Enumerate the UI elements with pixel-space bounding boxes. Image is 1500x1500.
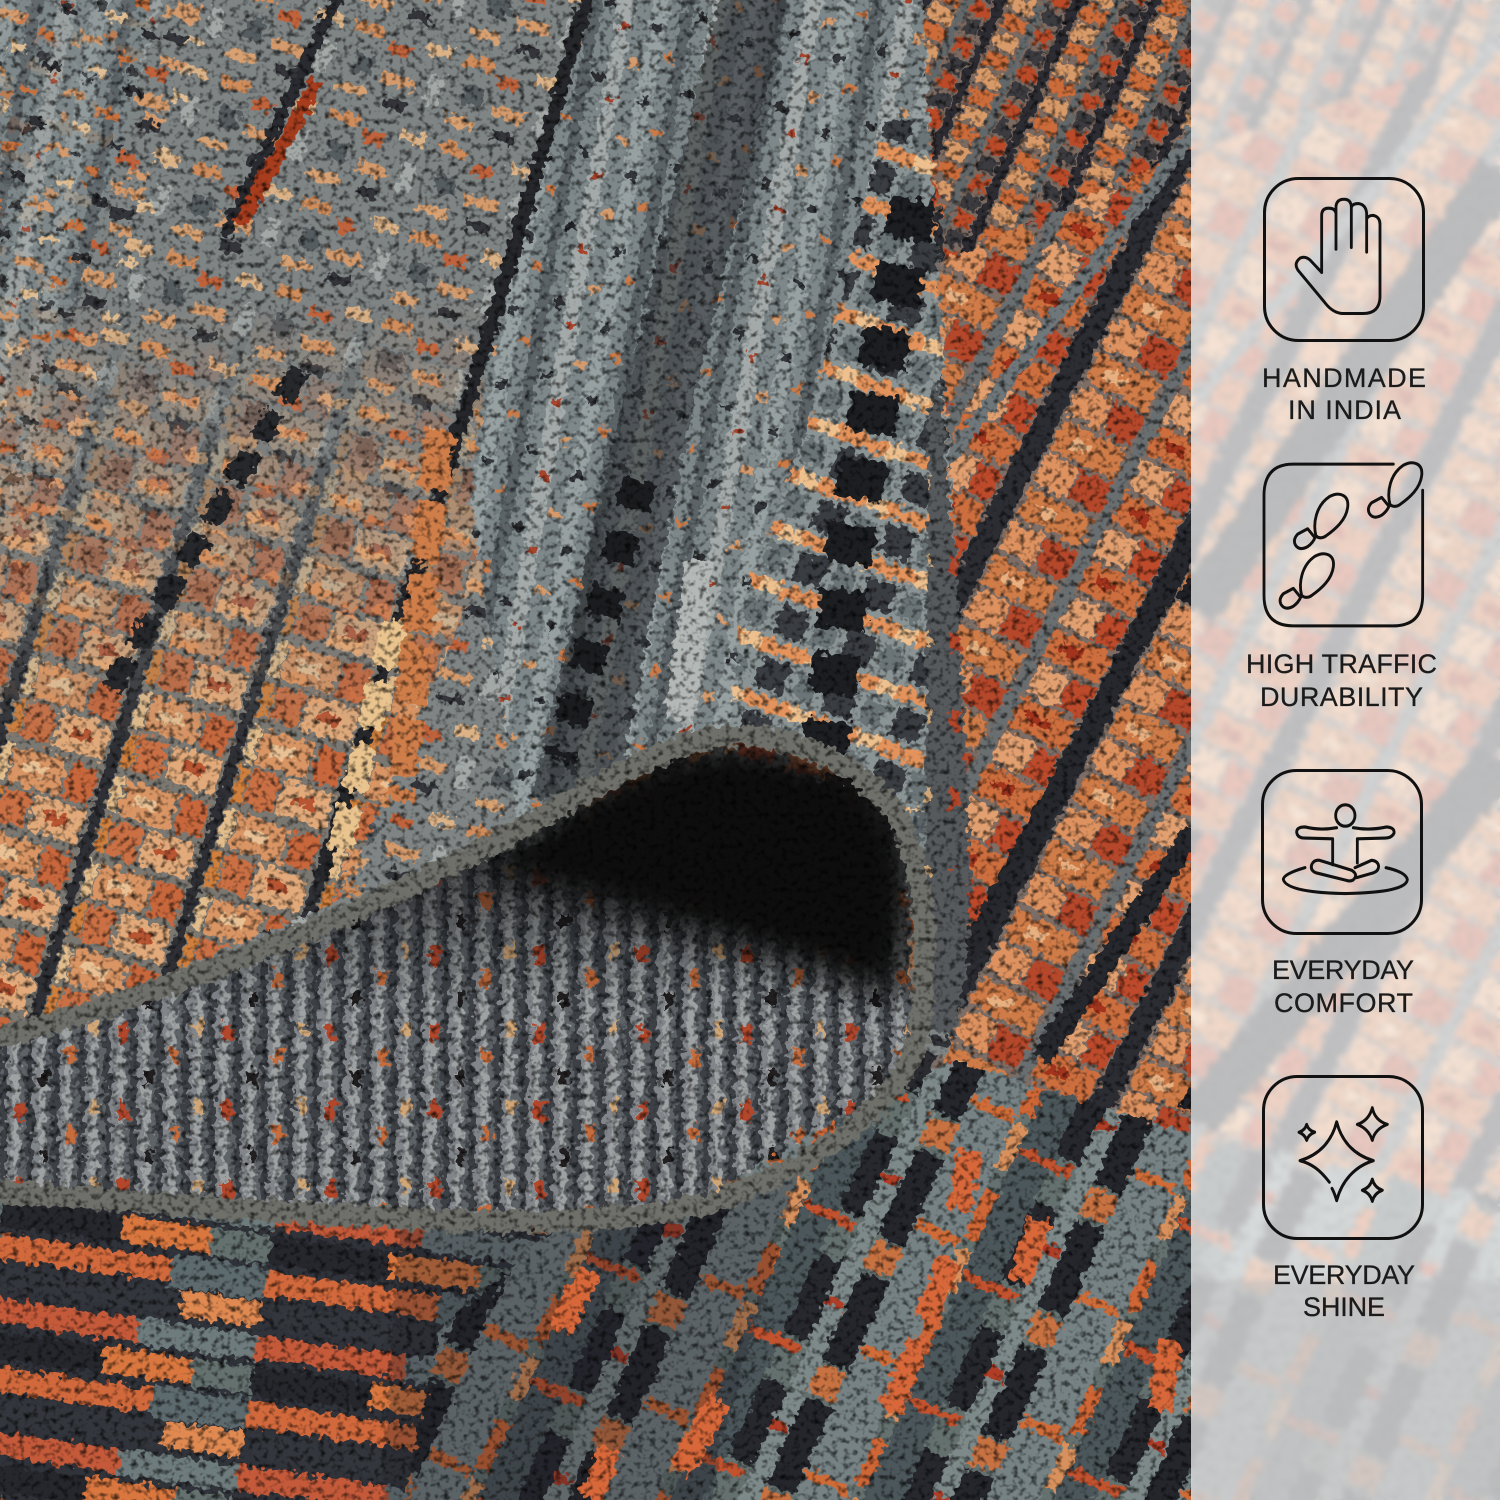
dark diagonal stripes behind side panel (1195, 170, 1500, 1120)
feature: everyday shine (1264, 1076, 1422, 1322)
edge binding of the fold (0, 735, 924, 1221)
label: everyday shine: SHINE (1303, 1292, 1385, 1322)
pale grey stripe (680, 560, 700, 720)
label: high traffic durability (1246, 649, 1437, 712)
bottom right grey plaid floor (300, 1060, 1500, 1500)
icon: sparkles in rounded square (1264, 1076, 1422, 1238)
label: handmade in India: HANDMADE (1262, 363, 1426, 393)
top left grey (0, 0, 164, 520)
orange and black check column (730, 120, 968, 820)
lower left orange sector (0, 322, 488, 1028)
bottom left dark and orange bars (0, 1190, 560, 1500)
black dashed check blocks (825, 200, 915, 750)
dark hollow under the fold (480, 740, 909, 1000)
translucent side panel (1191, 0, 1500, 1500)
dark vertical band (530, 0, 795, 800)
label: high traffic durability: HIGH TRAFFIC (1246, 649, 1437, 679)
bottom blocks (560, 1150, 1170, 1500)
flecks on right side wall (922, 398, 964, 878)
label: everyday shine (1273, 1260, 1415, 1322)
right side wall of roll (907, 380, 974, 1037)
rolled rug top surface (0, 0, 980, 1070)
label: everyday comfort: EVERYDAY (1272, 955, 1414, 985)
tan flecks over top left grey (0, 0, 206, 569)
label: high traffic durability: DURABILITY (1260, 682, 1423, 712)
left grey and orange sector (0, 0, 980, 1070)
black line on roll (320, 0, 592, 880)
dark dashed stripe (105, 370, 300, 700)
dark fleck stripes (560, 480, 640, 760)
dark diagonal stripes on ground (965, 535, 1195, 1060)
dark shade on lower centre floor (380, 1170, 800, 1500)
label: everyday comfort (1272, 955, 1414, 1018)
dark stripe upper (225, 0, 345, 235)
feature: handmade in India (1262, 178, 1426, 425)
red stripe (240, 80, 318, 225)
label: everyday shine: EVERYDAY (1273, 1260, 1415, 1290)
label: handmade in India (1262, 363, 1426, 425)
feature: everyday comfort (1262, 770, 1422, 1018)
label: everyday comfort: COMFORT (1274, 988, 1413, 1018)
pale dashed stripe (340, 620, 395, 850)
icon: footprints in open rounded square (1264, 463, 1423, 626)
grey right sector of the roll (470, 0, 975, 1060)
orange dashed stripe (400, 430, 440, 800)
grey diagonal stripes on ground (940, 40, 1500, 470)
dark shade behind lower side panel (1191, 1280, 1500, 1500)
fine woven top right area (915, 0, 1500, 260)
feature: high traffic durability (1246, 463, 1437, 712)
label: handmade in India: IN INDIA (1288, 395, 1401, 425)
underside of rug (0, 750, 915, 1225)
icon: meditating figure in rounded square (1262, 770, 1422, 934)
feature list (1246, 178, 1437, 1322)
icon: hand in rounded square (1264, 178, 1424, 340)
